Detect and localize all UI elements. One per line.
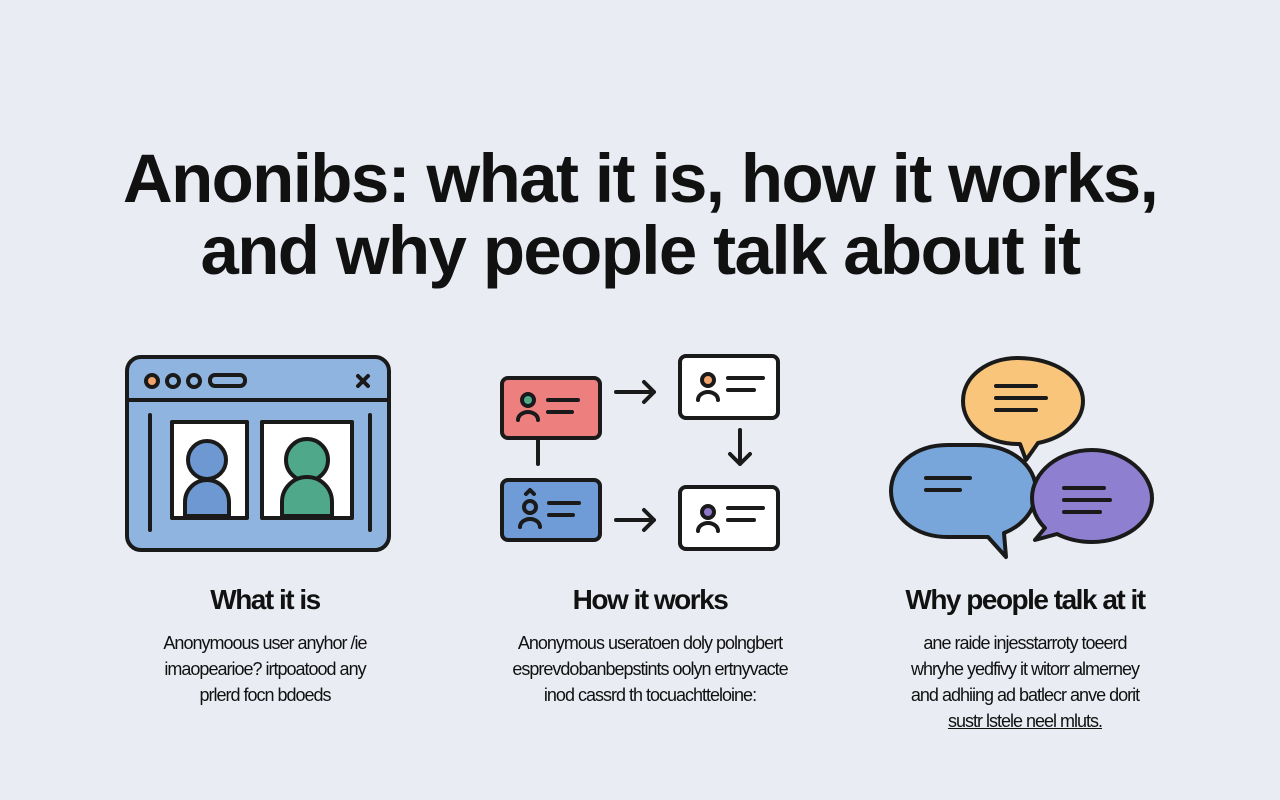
column: how it works	[512, 584, 788, 705]
column: how it works: Anonymous useratoen doly polngbert	[518, 633, 782, 653]
column: what it is: Anonymoous user anyhor /ie	[163, 633, 367, 653]
column: why people talk: whryhe yedfivy it witorr almerney	[911, 659, 1139, 679]
column: how it works: inod cassrd th tocuachtteloine:	[544, 685, 756, 705]
column: how it works: esprevdobanbepstints oolyn ertnyvacte	[512, 659, 788, 679]
column: what it is: What it is	[210, 584, 320, 615]
title: Anonibs: what it is, how it works,	[123, 140, 1157, 217]
column: how it works: How it works	[573, 584, 727, 615]
title: and why people talk about it	[200, 212, 1080, 289]
column: why people talk	[905, 584, 1146, 731]
column: what it is: prlerd focn bdoeds	[199, 685, 331, 705]
column: why people talk: Why people talk at it	[905, 584, 1145, 615]
title	[123, 140, 1157, 289]
column: what it is: imaopearioe? irtpoatood any	[164, 659, 366, 679]
column: why people talk: sustr lstele neel mluts.	[948, 711, 1102, 731]
column: why people talk: ane raide injesstarroty toeerd	[923, 633, 1127, 653]
column: what it is	[163, 584, 367, 705]
column: why people talk: and adhiing ad batlecr anve dorit	[911, 685, 1139, 705]
